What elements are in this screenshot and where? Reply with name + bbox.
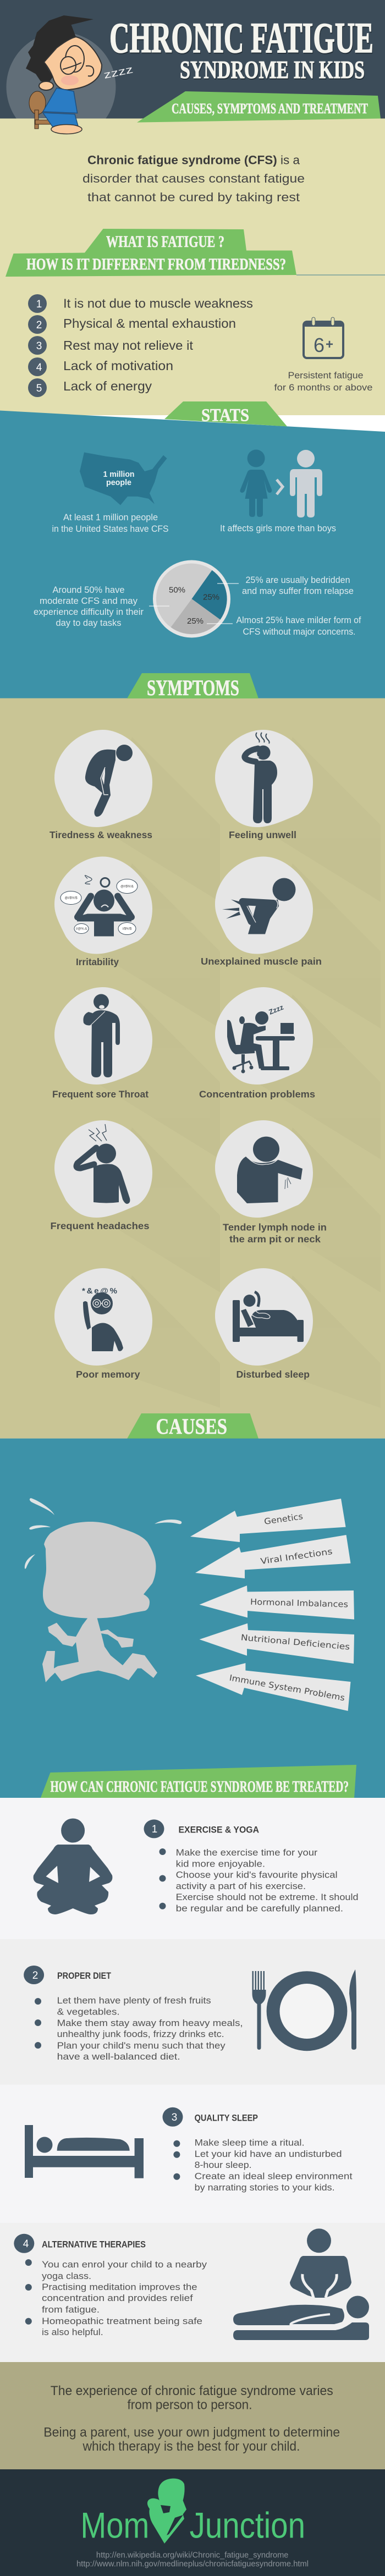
- body text: unhealthy junk foods, frizzy drinks etc.: [57, 2029, 224, 2039]
- arrow: hormonal imbalances: Hormonal Imbalances: [250, 1597, 348, 1609]
- body text: be regular and be carefully planned.: [176, 1904, 343, 1914]
- snoring letters: zzzz: [103, 64, 134, 81]
- arrow: immune system problems: [196, 1663, 351, 1711]
- icon: calendar 6+: +: [326, 337, 333, 352]
- tear drops: [25, 1498, 182, 1569]
- symptom: irritability: #@%.&: [76, 927, 87, 931]
- header: [0, 0, 385, 123]
- bullets: [173, 2140, 180, 2180]
- number badge: [14, 2234, 34, 2253]
- body text: Choose your kid's favourite physical: [176, 1870, 338, 1880]
- panel: proper diet: [0, 1939, 385, 2085]
- cream intro background: [0, 118, 385, 415]
- caption: 50 percent: day to day tasks: [56, 618, 121, 628]
- symptom: irritability: @#$%!$: [64, 896, 78, 900]
- icon: calendar 6+: [304, 317, 343, 358]
- pants: [43, 113, 79, 128]
- body text: kid more enjoyable.: [176, 1859, 265, 1869]
- symptom: tender lymph node: the arm pit or neck: [229, 1234, 321, 1245]
- illustration: sleepy boy on chair: [26, 15, 134, 134]
- panel: stats: [0, 401, 385, 699]
- pie chart: 50%: [169, 585, 185, 595]
- source links: http://en.wikipedia.org/wiki/Chronic_fatigue_syndrome: [96, 2551, 288, 2560]
- panel: footer: [0, 2469, 385, 2576]
- intro text: Chronic fatigue syndrome (CFS) is a: [87, 153, 300, 167]
- symptom: tender lymph node: [215, 1120, 327, 1245]
- heading: what is fatigue: WHAT IS FATIGUE ?: [106, 233, 224, 251]
- caption: 50 percent: moderate CFS and may: [40, 596, 138, 606]
- arrow: viral infections: Viral Infections: [260, 1546, 333, 1566]
- body text: & vegetables.: [57, 2007, 120, 2017]
- spotlight circle: [7, 34, 116, 119]
- body text: Let your kid have an undisturbed: [195, 2149, 342, 2159]
- symptom: irritability: @#$%!&: [120, 885, 134, 889]
- logo: MomJunction: Junction: [190, 2505, 305, 2545]
- body text: [176, 1848, 359, 1914]
- caption: 1 million: [52, 513, 168, 534]
- arrow: hormonal imbalances: [199, 1586, 354, 1620]
- face: [44, 37, 102, 90]
- symptom: irritability: [54, 857, 152, 967]
- number badge: [144, 1819, 164, 1838]
- body text: Exercise should not be extreme. It should: [176, 1892, 359, 1902]
- symptom: concentration problems: Concentration problems: [199, 1089, 315, 1100]
- body text: Plan your child's menu such that they: [57, 2041, 226, 2051]
- caption: persistent fatigue: [274, 370, 373, 393]
- panel: quality sleep: [0, 2085, 385, 2223]
- symptom: poor memory: Poor memory: [76, 1369, 140, 1380]
- map of the United States: people: [106, 478, 131, 487]
- chair: [29, 91, 54, 129]
- intro text: disorder that causes constant fatigue: [82, 172, 305, 185]
- heading: QUALITY SLEEP: [195, 2113, 258, 2123]
- bullets: [25, 2259, 32, 2325]
- heading: what is fatigue: HOW IS IT DIFFERENT FROM TIREDNESS?: [26, 255, 286, 273]
- body text: have a well-balanced diet.: [57, 2052, 180, 2062]
- symptom: concentration problems: Zzzz: [268, 1003, 285, 1016]
- causes heading: [127, 1413, 258, 1439]
- logo: MomJunction: [80, 2479, 305, 2545]
- body text: Make sleep time a ritual.: [195, 2138, 305, 2148]
- symptom: concentration problems: [199, 987, 315, 1100]
- pie chart: 25%: [187, 617, 204, 626]
- caption: persistent fatigue: Persistent fatigue: [288, 370, 363, 381]
- number badge: 1: [152, 1824, 157, 1835]
- arrow: genetics: [190, 1499, 346, 1542]
- caption: 25 percent bedridden: 25% are usually bedridden: [245, 575, 350, 585]
- long shadows: [99, 737, 381, 1408]
- numbered list: It is not due to muscle weakness: [63, 296, 253, 310]
- caption: 50 percent: [34, 585, 144, 628]
- arrow: immune system problems: Immune System Problems: [229, 1673, 346, 1703]
- symptom: frequent sore throat: [52, 987, 152, 1100]
- bullets: [160, 1848, 166, 1909]
- icon: bed: [25, 2125, 144, 2178]
- caption: 50 percent: Around 50% have: [53, 585, 124, 595]
- number badge: [24, 1966, 44, 1984]
- icon: plate, fork and knife: [252, 1969, 356, 2051]
- symptom: frequent sore throat: Frequent sore Throat: [52, 1089, 148, 1100]
- feet: [51, 124, 82, 134]
- logo: MomJunction: Mom: [80, 2505, 149, 2545]
- caption: 25 percent milder: [237, 615, 361, 637]
- panel: closing note: which therapy is the best for your child.: [82, 2439, 300, 2454]
- pie chart: [149, 560, 239, 638]
- cheek: [61, 75, 79, 85]
- arrow: viral infections: [195, 1535, 351, 1578]
- number badge: 2: [32, 1970, 38, 1981]
- caption: 1 million: At least 1 million people: [63, 513, 158, 522]
- numbered list: 4: [36, 362, 42, 373]
- icon: girl: [240, 450, 272, 517]
- shirt: [43, 88, 78, 113]
- heading: EXERCISE & YOGA: [178, 1825, 259, 1835]
- greater-than sign: [277, 480, 283, 494]
- intro text: that cannot be cured by taking rest: [87, 190, 300, 204]
- symptom: frequent headaches: [51, 1120, 152, 1231]
- symptom: feeling unwell: [215, 730, 313, 840]
- arrow: nutritional deficiencies: [199, 1623, 354, 1664]
- source links: http://www.nlm.nih.gov/medlineplus/chronicfatiguesyndrome.html: [76, 2560, 309, 2569]
- subtitle banner: [137, 91, 381, 123]
- caption: 25 percent bedridden: and may suffer from relapse: [242, 586, 354, 596]
- head: [43, 1522, 156, 1619]
- body text: Homeopathic treatment being safe: [42, 2316, 202, 2326]
- body text: is also helpful.: [42, 2327, 103, 2337]
- numbered list: 3: [36, 340, 42, 352]
- numbered list: Lack of motivation: [63, 359, 173, 373]
- symptom: poor memory: *&e@%: [82, 1286, 117, 1296]
- body text: 8-hour sleep.: [195, 2160, 252, 2170]
- number badge: 4: [23, 2238, 29, 2250]
- symptom: tender lymph node: Tender lymph node in: [223, 1222, 327, 1233]
- caption: persistent fatigue: for 6 months or above: [274, 382, 373, 393]
- body text: You can enrol your child to a nearby: [42, 2260, 207, 2270]
- ear: [39, 81, 53, 90]
- panel: alternative therapies: [0, 2223, 385, 2362]
- panel: closing note: from person to person.: [128, 2398, 252, 2413]
- heading: ALTERNATIVE THERAPIES: [42, 2239, 146, 2250]
- caption: 50 percent: experience difficulty in their: [34, 607, 144, 617]
- stats heading: [164, 401, 287, 426]
- symptom: unexplained muscle pain: Unexplained muscle pain: [201, 956, 322, 967]
- map of the United States: 1 million: [103, 470, 134, 479]
- body text: yoga class.: [42, 2271, 91, 2281]
- caption: 25 percent bedridden: [242, 575, 354, 596]
- hair: [26, 15, 94, 82]
- arrow: nutritional deficiencies: Nutritional Deficiencies: [240, 1632, 350, 1652]
- symptom: poor memory: [54, 1268, 152, 1380]
- panel: symptoms: [0, 673, 385, 1439]
- symptom: disturbed sleep: [215, 1268, 313, 1380]
- body text: activity a part of his exercise.: [176, 1881, 306, 1891]
- panel: closing note: Being a parent, use your own judgment to determine: [43, 2425, 340, 2440]
- icon: massage therapist and patient: [233, 2228, 369, 2340]
- numbered list: Rest may not relieve it: [63, 338, 194, 353]
- crying child silhouette: [42, 1522, 157, 1682]
- icon: meditating figure: [34, 1818, 112, 1914]
- map of the United States: [80, 452, 167, 505]
- treatment heading: [41, 1765, 356, 1798]
- body text: Make the exercise time for your: [176, 1848, 318, 1858]
- leg gaps: [46, 1866, 100, 1883]
- caption: 25 percent milder: Almost 25% have milder form of: [237, 615, 361, 625]
- caption: girls vs boys: It affects girls more than boys: [220, 524, 336, 533]
- body text: by narrating stories to your kids.: [195, 2183, 335, 2193]
- heading: what is fatigue: [6, 229, 385, 277]
- icon: boy: [290, 450, 322, 518]
- numbered list: 2: [36, 320, 42, 331]
- number badge: [163, 2107, 183, 2127]
- body text: [57, 1996, 243, 2062]
- body text: Let them have plenty of fresh fruits: [57, 1996, 211, 2006]
- body text: Make them stay away from heavy meals,: [57, 2018, 243, 2028]
- eyes: [61, 46, 94, 76]
- panel: closing note: The experience of chronic fatigue syndrome varies: [51, 2384, 333, 2398]
- symptom: disturbed sleep: Disturbed sleep: [237, 1369, 310, 1380]
- symptom: frequent headaches: Frequent headaches: [51, 1220, 150, 1231]
- body text: concentration and provides relief: [42, 2293, 193, 2303]
- symptom: feeling unwell: Feeling unwell: [229, 829, 296, 840]
- numbered list: 5: [36, 383, 42, 394]
- gap between mother and baby: [161, 2505, 183, 2535]
- causes heading: CAUSES: [156, 1414, 227, 1439]
- symptom: tiredness and weakness: Tiredness & weakness: [50, 829, 152, 840]
- symptom: tiredness and weakness: [50, 730, 152, 840]
- icon: calendar 6+: 6: [314, 334, 324, 356]
- number badge: 3: [172, 2112, 177, 2123]
- title: [109, 14, 373, 84]
- body and limbs: [42, 1617, 157, 1682]
- caption: 1 million: in the United States have CFS: [52, 524, 168, 534]
- source links: [76, 2551, 309, 2569]
- numbered list: 1: [36, 299, 42, 310]
- symptom: irritability: #$%!$: [122, 927, 132, 931]
- heading: PROPER DIET: [57, 1970, 112, 1981]
- panel: causes: [0, 1439, 385, 1798]
- arrow: genetics: Genetics: [263, 1511, 304, 1527]
- body text: Create an ideal sleep environment: [195, 2172, 353, 2182]
- caption: 25 percent milder: CFS without major concerns.: [243, 627, 355, 637]
- symptom: unexplained muscle pain: [201, 857, 322, 967]
- body text: Practising meditation improves the: [42, 2282, 197, 2292]
- numbered list: [28, 294, 253, 397]
- numbered list: Physical & mental exhaustion: [63, 316, 236, 331]
- numbered list: Lack of energy: [63, 379, 152, 393]
- symptoms heading: SYMPTOMS: [147, 675, 239, 700]
- symptom: irritability: Irritability: [76, 956, 119, 967]
- stats heading: STATS: [201, 406, 249, 426]
- body text: [42, 2260, 207, 2337]
- bullets: [35, 1998, 41, 2049]
- pie chart: 25%: [203, 593, 219, 602]
- panel: exercise and yoga: [0, 1798, 385, 1939]
- body text: [195, 2138, 353, 2193]
- mother and baby silhouette: [147, 2479, 186, 2544]
- intro text: [82, 153, 305, 204]
- panel: closing note: [0, 2362, 385, 2469]
- body text: from fatigue.: [42, 2305, 100, 2315]
